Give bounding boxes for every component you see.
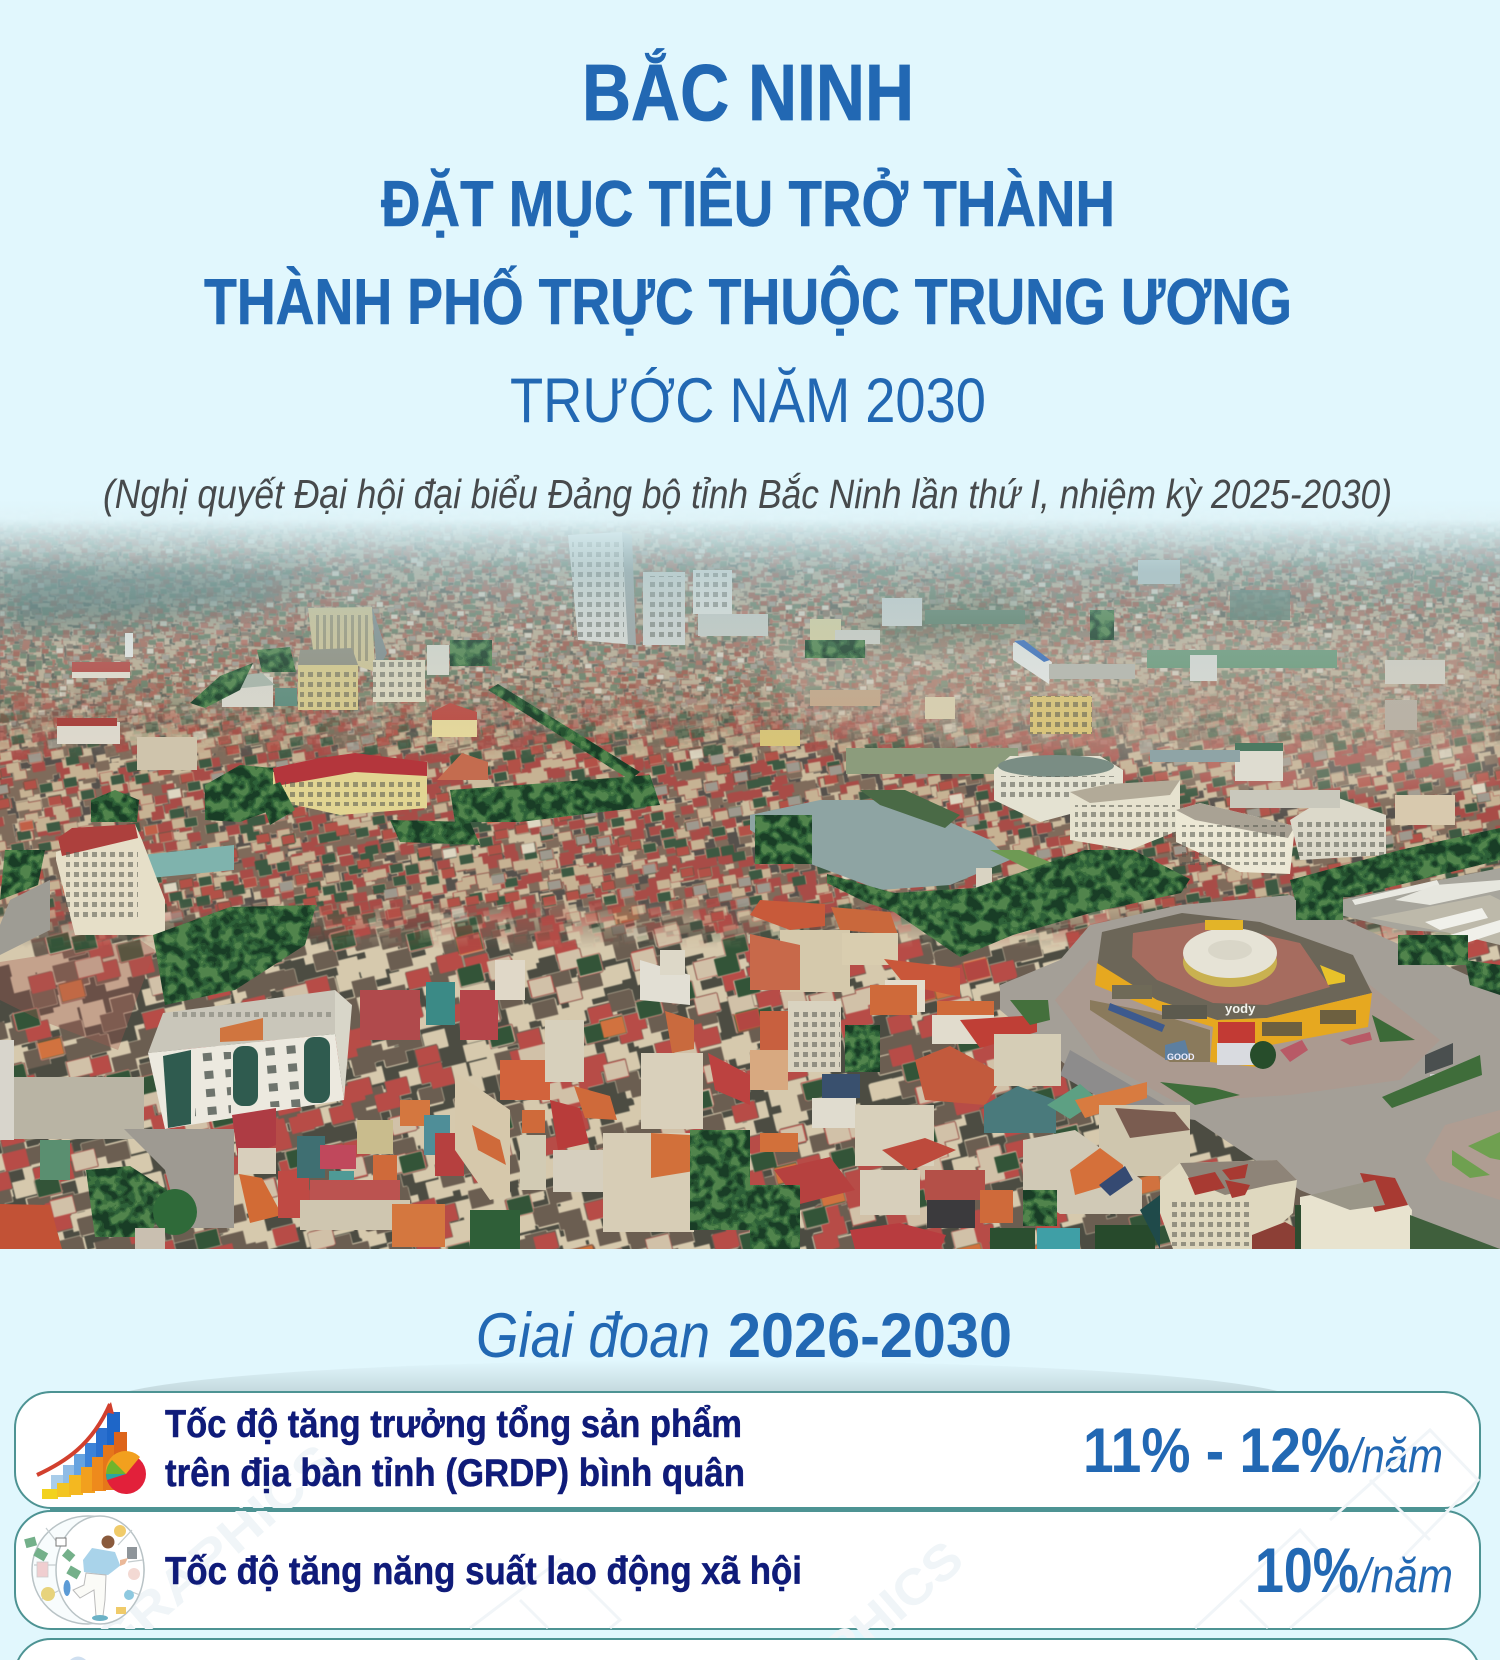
text: GRDP growth label (165, 1403, 745, 1495)
photo: houses in the lower centre (750, 900, 1190, 1249)
photo: trees on the right (1290, 828, 1500, 995)
heading line: Đặt mục tiêu trở thành: ĐẶT MỤC TIÊU TRỞ THÀNH (381, 167, 1115, 240)
photo: base city texture (0, 524, 1500, 1249)
value: 11% - 12%/năm: /năm (1347, 1430, 1443, 1483)
panel: labour productivity card (15, 1430, 1480, 1660)
watermark: VNA marks (470, 1430, 1478, 1628)
text: GRDP growth label: Tốc độ tăng trưởng tổng sản phẩm (165, 1403, 742, 1446)
value: 10%/năm (1255, 1536, 1453, 1606)
value: 10%/năm: 10% (1255, 1536, 1359, 1606)
icon: white circular roof (1183, 928, 1277, 987)
dome shadow above the cards (125, 1360, 1282, 1392)
photo: apartment block and pond (0, 824, 316, 1050)
icon: person running in a wheel (24, 1516, 144, 1624)
photo sign: yody: yody (1225, 1001, 1256, 1016)
section heading: Giai đoạn 2026-2030: Giai đoạn (476, 1301, 710, 1371)
icon: partial third icon (70, 1656, 86, 1660)
photo: houses in the lower left (0, 950, 750, 1249)
photo: roads and pavements (1000, 868, 1500, 1249)
photo: white high-rise towers (568, 532, 768, 645)
value: 11% - 12%/năm: 11% - 12% (1083, 1416, 1350, 1486)
photo: city plaza and gardens (750, 748, 1190, 957)
heading: Bắc Ninh: BẮC NINH (582, 48, 914, 137)
text: GRDP growth label: trên địa bàn tỉnh (GRDP) bình quân (165, 1452, 745, 1495)
heading line: Trước năm 2030: TRƯỚC NĂM 2030 (510, 366, 986, 436)
photo: large white office building with arches (14, 990, 352, 1228)
value: 10%/năm: /năm (1356, 1550, 1453, 1603)
text: productivity label: Tốc độ tăng năng suất lao động xã hội (165, 1550, 802, 1593)
photo: white civic buildings (994, 750, 1455, 874)
section heading: Giai đoạn 2026-2030: 2026-2030 (728, 1301, 1012, 1371)
panel: GRDP growth card (15, 1392, 1480, 1660)
section heading: Giai đoạn 2026-2030 (476, 1301, 1012, 1371)
photo: yellow government hall (91, 684, 660, 845)
photo: top haze fade (0, 500, 1500, 740)
photo: yellow octagonal shopping centre (1090, 913, 1372, 1069)
photo: aerial view of Bac Ninh city (0, 520, 1500, 1249)
panel: third card, cropped at the bottom (15, 1639, 1480, 1660)
icon: rising bar chart with pie (37, 1402, 146, 1499)
photo: billboard, lawns and islands (1010, 1000, 1500, 1200)
photo: upper left towers (57, 607, 492, 770)
photo sign: good: GOOD (1167, 1052, 1195, 1062)
photo: cream apartment blocks bottom right (1140, 1160, 1500, 1249)
photo: upper right district (760, 560, 1445, 781)
heading line: Thành phố trực thuộc Trung ương: THÀNH PHỐ TRỰC THUỘC TRUNG ƯƠNG (204, 265, 1292, 338)
